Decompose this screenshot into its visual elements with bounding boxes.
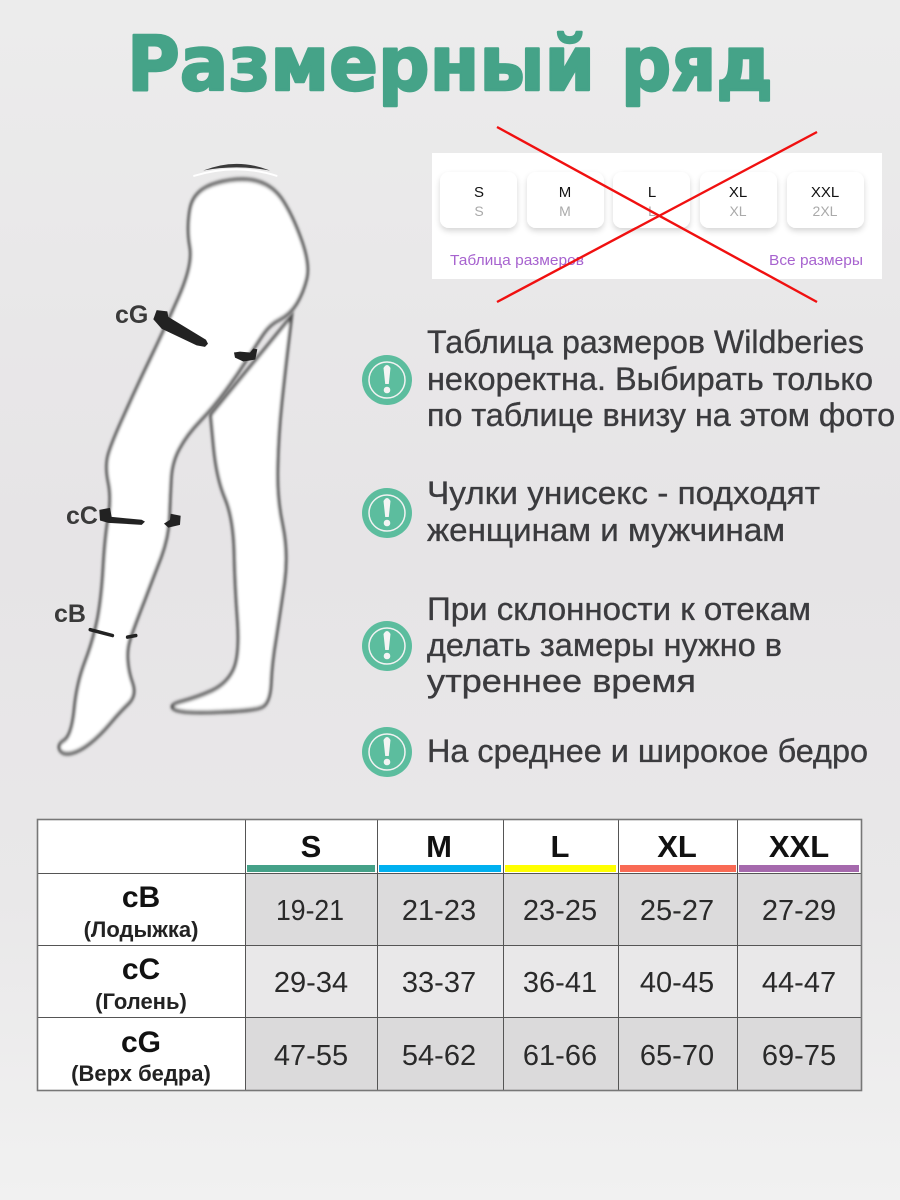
title: Размерный <box>127 19 595 108</box>
size table: 65-70 <box>640 1040 714 1072</box>
size table: 21-23 <box>402 895 476 927</box>
note 1: Таблица размеров Wildberies <box>427 324 864 360</box>
crossed-out size selector screenshot <box>432 127 882 302</box>
size table: M <box>426 829 452 864</box>
crossed-out size selector screenshot: XL <box>729 203 747 219</box>
size table: (Верх бедра) <box>71 1061 211 1086</box>
size table: S <box>301 829 321 864</box>
size table: (Лодыжка) <box>84 917 198 942</box>
size table: 69-75 <box>762 1040 836 1072</box>
crossed-out size selector screenshot: S <box>474 203 484 219</box>
size table: 25-27 <box>640 895 714 927</box>
crossed-out size selector screenshot: Все размеры <box>769 252 863 269</box>
size table: L <box>551 829 569 864</box>
note 3: утреннее время <box>427 663 696 699</box>
note 2: Чулки унисекс - подходят <box>427 475 820 511</box>
size table: 36-41 <box>523 967 597 999</box>
leg diagram: cC <box>66 502 98 530</box>
note 4 <box>362 727 868 777</box>
size table: 19-21 <box>276 895 344 927</box>
note 1 <box>362 324 895 433</box>
leg diagram <box>54 164 308 754</box>
crossed-out size selector screenshot: M <box>559 184 571 201</box>
size table: 47-55 <box>274 1040 348 1072</box>
note 4: На среднее и широкое бедро <box>427 733 868 769</box>
note 3: делать замеры нужно в <box>427 627 782 663</box>
size table <box>37 819 862 1090</box>
note 1: некоректна. Выбирать только <box>427 361 873 397</box>
note 2 <box>362 475 820 548</box>
title: ряд <box>621 19 773 108</box>
size table: 27-29 <box>762 895 836 927</box>
crossed-out size selector screenshot: M <box>559 203 571 219</box>
size table: cB <box>122 881 160 914</box>
note 3: При склонности к отекам <box>427 591 811 627</box>
size table: 29-34 <box>274 967 348 999</box>
size table: XL <box>657 829 697 864</box>
leg diagram: cB <box>54 600 86 628</box>
crossed-out size selector screenshot: L <box>648 184 656 201</box>
crossed-out size selector screenshot: 2XL <box>813 203 838 219</box>
crossed-out size selector screenshot: S <box>474 184 484 201</box>
note 3 <box>362 591 811 699</box>
leg diagram: cG <box>115 301 148 329</box>
crossed-out size selector screenshot: XXL <box>811 184 839 201</box>
size table: XXL <box>769 829 829 864</box>
size table: 61-66 <box>523 1040 597 1072</box>
crossed-out size selector screenshot: XL <box>729 184 747 201</box>
note 1: по таблице внизу на этом фото <box>427 397 895 433</box>
size table: 44-47 <box>762 967 836 999</box>
size table: 33-37 <box>402 967 476 999</box>
size table: 40-45 <box>640 967 714 999</box>
crossed-out size selector screenshot: Таблица размеров <box>450 252 584 269</box>
crossed-out size selector screenshot: L <box>648 203 656 219</box>
size table: 54-62 <box>402 1040 476 1072</box>
note 2: женщинам и мужчинам <box>427 512 785 548</box>
size table: 23-25 <box>523 895 597 927</box>
size table: cG <box>121 1026 161 1059</box>
size table: cC <box>122 953 160 986</box>
size table: (Голень) <box>95 989 187 1014</box>
